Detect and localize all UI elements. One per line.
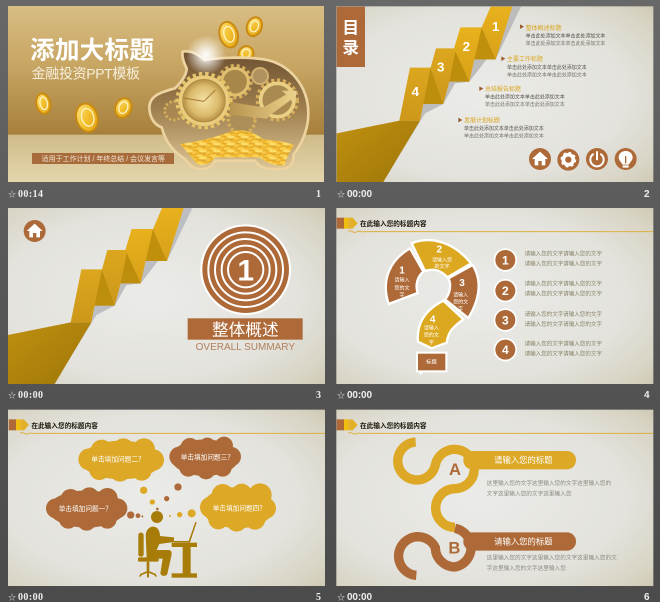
paper background: [8, 208, 325, 384]
list item 2: [494, 279, 602, 302]
footer slide 4: 00:00: [347, 390, 372, 401]
paper background: [336, 410, 653, 586]
list item 3: [494, 308, 602, 332]
footer slide 1: 1: [316, 189, 321, 200]
banner: [32, 153, 174, 164]
folded ribbon: 3: [437, 60, 444, 75]
list item 1: 整体概述标题: [526, 24, 562, 32]
segment 3 label: 请输入: [453, 291, 468, 298]
brown contents tab: 录: [342, 39, 359, 58]
folded ribbon: 4: [412, 84, 420, 99]
list item 3: 请输入您的文字请输入您的文字: [525, 320, 602, 328]
list item 3: 单击此处添加文本单击此处添加文本: [485, 94, 565, 101]
thought cloud 4: [200, 483, 276, 532]
list item 2: 请输入您的文字请输入您的文字: [525, 280, 602, 288]
text block A: 文字这里输入您的文字这里输入您: [487, 490, 572, 498]
list item 2: [501, 55, 587, 78]
icon: home: [529, 148, 551, 170]
banner: 适用于工作计划 / 年终总结 / 会议发言等: [42, 154, 165, 163]
list item 4: 发展计划标题: [464, 116, 500, 124]
gears: [165, 66, 297, 133]
footer slide 2: 2: [644, 189, 650, 200]
segment 3 label: [453, 278, 468, 312]
list item 2: 2: [502, 284, 509, 298]
header: 在此输入您的标题内容: [360, 421, 427, 430]
text block B: 这里输入您的文字这里输入您的文字这里输入您的文: [487, 553, 617, 561]
icon: left coins: [34, 92, 134, 134]
light glow: [186, 35, 226, 75]
icon: person at desk: [138, 511, 197, 578]
header: [337, 218, 653, 233]
list item 1: 1: [502, 253, 509, 267]
section title banner: 整体概述: [212, 321, 279, 340]
list item 2: 单击此处添加文本单击此处添加文本: [507, 71, 587, 78]
folded ribbon: [8, 208, 192, 384]
segment 1 label: 字: [400, 292, 405, 299]
segment 2 label: 请输入您: [432, 256, 452, 263]
coin pile: [180, 130, 294, 165]
footer slide 3: 00:00: [18, 390, 43, 401]
footer slide 1: ☆: [8, 190, 16, 199]
footer slide 6: ☆: [337, 593, 345, 602]
list item 3: 请输入您的文字请输入您的文字: [525, 310, 602, 318]
subtitle: 金融投资PPT模板: [32, 65, 140, 81]
growth arrow: [230, 91, 297, 119]
footer slide 4: 4: [644, 390, 650, 401]
segment 2: [412, 240, 471, 277]
brown curve and bar: [399, 528, 576, 575]
paper background: [336, 6, 653, 182]
folded ribbon: [337, 7, 521, 182]
segment 1 label: 1: [399, 266, 405, 277]
concentric badge: [200, 224, 291, 315]
list item 1: 请输入您的文字请输入您的文字: [525, 260, 602, 268]
text block B: [487, 553, 617, 572]
letter A: A: [449, 460, 461, 479]
segment 3: [445, 265, 479, 318]
footer slide 1: 00:14: [18, 189, 43, 200]
title: 添加大标题: [30, 37, 154, 65]
segment 2 label: [432, 244, 452, 270]
thought cloud 1: 单击填加问题一？: [59, 504, 112, 513]
list item 2: 单击此处添加文本单击此处添加文本: [507, 64, 587, 71]
segment 2 label: 2: [437, 244, 443, 255]
paper background: [8, 410, 325, 586]
panel: slide 2 contents: [336, 6, 653, 182]
list item 3: 单击此处添加文本单击此处添加文本: [485, 101, 565, 108]
icon: settings gear: [557, 149, 579, 171]
footer slide 4: ☆: [337, 391, 345, 400]
footer slide 1: [8, 189, 321, 200]
segment 4 label: 请输入: [424, 325, 439, 332]
cover floor: [8, 135, 324, 182]
icon: home: [24, 220, 46, 242]
footer slide 5: ☆: [8, 593, 16, 602]
segment 4 label: [424, 314, 439, 346]
clock gear: [177, 74, 231, 127]
segment 3 label: 3: [459, 278, 465, 289]
brown curve and bar: 请输入您的标题: [494, 536, 553, 546]
list item 4: 请输入您的文字请输入您的文字: [525, 349, 602, 357]
concentric badge: 1: [237, 254, 254, 287]
segment 1: [386, 248, 423, 304]
thought cloud 3: [169, 437, 241, 479]
header: [9, 419, 325, 434]
list item 2: 主要工作标题: [507, 55, 543, 63]
panel: slide 4 question mark: [336, 208, 653, 384]
list item 4: [458, 116, 544, 139]
list item 1: [494, 248, 602, 272]
list item 4: 请输入您的文字请输入您的文字: [525, 339, 602, 347]
footer slide 2: ☆: [337, 190, 345, 199]
paper background: [336, 208, 653, 384]
list item 1: [520, 24, 605, 47]
icon: power: [586, 148, 608, 170]
segment 1 label: 您的文: [395, 284, 409, 291]
folded ribbon: 2: [463, 39, 470, 54]
letter B: B: [448, 538, 460, 557]
icon: piggy bank: [149, 51, 308, 169]
list item 3: 3: [502, 313, 509, 327]
segment 3 label: 字: [458, 305, 463, 312]
question mark chart: [386, 240, 479, 348]
footer slide 5: [8, 592, 321, 602]
footer slide 2: 00:00: [347, 189, 372, 200]
footer slide 6: [337, 592, 650, 602]
thought cloud 2: 单击填加问题二？: [91, 454, 145, 463]
section subtitle: OVERALL SUMMARY: [196, 342, 295, 353]
list item 4: 4: [502, 343, 509, 357]
brown contents tab: 目: [342, 18, 359, 37]
icon: light bulb: [615, 148, 637, 170]
thought cloud 4: 单击填加问题四？: [213, 503, 266, 512]
panel: slide 5 thinking person: [8, 410, 325, 586]
thought cloud 3: 单击填加问题三？: [181, 453, 234, 462]
list item 1: 单击此处添加文本单击此处添加文本: [526, 33, 605, 40]
label box: 标题: [426, 357, 437, 365]
section title banner: [188, 318, 303, 340]
gold curve and bar: [398, 442, 576, 527]
header: [337, 419, 653, 434]
thought dots: [127, 483, 196, 519]
text block A: [487, 479, 611, 498]
segment 4 label: 字: [429, 339, 434, 346]
thought cloud 1: [46, 487, 127, 531]
cover background wall: [8, 6, 324, 135]
footer slide 3: [8, 390, 321, 401]
list item 4: 单击此处添加文本单击此处添加文本: [464, 132, 544, 139]
footer slide 2: [337, 189, 650, 200]
text block B: 字这里输入您的文字这里输入您: [487, 564, 566, 572]
segment 4: [418, 301, 463, 348]
list item 2: 请输入您的文字请输入您的文字: [525, 290, 602, 298]
footer slide 3: 3: [316, 390, 321, 401]
panel: slide 3 section title: [8, 208, 325, 384]
header: 在此输入您的标题内容: [31, 421, 98, 430]
footer slide 3: ☆: [8, 391, 16, 400]
list item 1: 单击此处添加文本单击此处添加文本: [526, 40, 605, 47]
footer slide 4: [337, 390, 650, 401]
brown contents tab: [337, 7, 365, 67]
panel: slide 1 cover: [8, 6, 324, 182]
gold curve and bar: 请输入您的标题: [494, 455, 553, 465]
folded ribbon: 1: [492, 19, 500, 34]
segment 1 label: [395, 266, 409, 299]
list item 4: [494, 338, 602, 361]
segment 2 label: 的文字: [435, 263, 449, 270]
list item 3: 总结报告标题: [485, 85, 521, 93]
list item 4: 单击此处添加文本单击此处添加文本: [464, 125, 544, 132]
list item 3: [479, 85, 565, 108]
list item 1: 请输入您的文字请输入您的文字: [525, 250, 602, 258]
segment 1 label: 请输入: [395, 277, 409, 284]
label box: [416, 352, 447, 375]
segment 3 label: 您的文: [453, 298, 468, 305]
text block A: 这里输入您的文字这里输入您的文字这里输入您的: [487, 479, 611, 487]
header: 在此输入您的标题内容: [360, 219, 427, 228]
segment 4 label: 您的文: [424, 332, 439, 339]
segment 4 label: 4: [430, 314, 436, 325]
icon: top coins: [216, 15, 265, 65]
thought cloud 2: [78, 438, 164, 482]
panel: slide 6 S curve: [336, 410, 653, 586]
